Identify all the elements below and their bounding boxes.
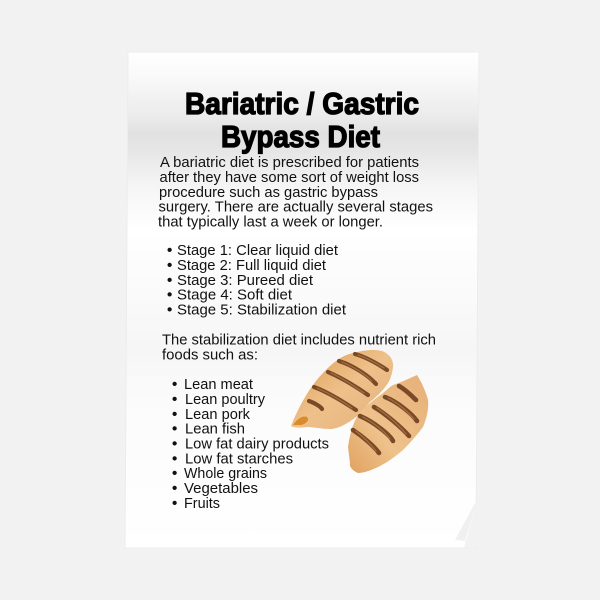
list: diet stages: • bbox=[167, 242, 172, 259]
list: nutrient rich foods: • bbox=[172, 406, 177, 423]
list: diet stages: • bbox=[167, 272, 172, 289]
stabilization paragraph bbox=[162, 332, 436, 364]
page curl bbox=[455, 498, 478, 548]
list: nutrient rich foods: • bbox=[172, 465, 177, 482]
title bbox=[185, 86, 419, 154]
list: diet stages: Stage 3: Pureed diet bbox=[177, 273, 313, 289]
list: diet stages bbox=[167, 242, 346, 318]
list: nutrient rich foods: • bbox=[172, 420, 177, 438]
intro paragraph: that typically last a week or longer. bbox=[158, 214, 383, 230]
list: nutrient rich foods: • bbox=[172, 495, 177, 512]
list: diet stages: • bbox=[167, 257, 172, 274]
title: Bariatric / Gastric bbox=[185, 86, 419, 121]
list: nutrient rich foods: • bbox=[172, 436, 177, 452]
list: diet stages: Stage 2: Full liquid diet bbox=[177, 258, 326, 274]
icon: grilled chicken breasts bbox=[291, 350, 428, 473]
list: nutrient rich foods: • bbox=[172, 391, 177, 408]
intro paragraph: surgery. There are actually several stages bbox=[158, 200, 433, 216]
title: Bypass Diet bbox=[221, 119, 380, 154]
list: nutrient rich foods: Vegetables bbox=[184, 481, 258, 497]
list: nutrient rich foods: Fruits bbox=[184, 496, 220, 512]
list: diet stages: Stage 4: Soft diet bbox=[177, 288, 292, 304]
poster sheet bbox=[125, 52, 479, 548]
intro paragraph: after they have some sort of weight loss bbox=[160, 170, 419, 186]
stabilization paragraph: The stabilization diet includes nutrient rich bbox=[162, 332, 436, 348]
intro paragraph bbox=[158, 155, 433, 230]
list: diet stages: Stage 1: Clear liquid diet bbox=[177, 243, 338, 259]
left chicken breast bbox=[291, 350, 393, 429]
list: nutrient rich foods bbox=[172, 376, 329, 512]
list: nutrient rich foods: • bbox=[172, 480, 177, 497]
list: diet stages: Stage 5: Stabilization diet bbox=[177, 302, 346, 318]
list: nutrient rich foods: Lean fish bbox=[185, 422, 245, 438]
intro paragraph: procedure such as gastric bypass bbox=[159, 185, 378, 201]
list: nutrient rich foods: Low fat starches bbox=[185, 452, 293, 468]
list: nutrient rich foods: • bbox=[172, 450, 177, 468]
list: nutrient rich foods: • bbox=[172, 376, 177, 393]
list: diet stages: • bbox=[167, 286, 172, 304]
right chicken breast bbox=[348, 375, 428, 473]
list: nutrient rich foods: Low fat dairy products bbox=[185, 436, 329, 452]
list: nutrient rich foods: Lean pork bbox=[185, 407, 251, 423]
list: nutrient rich foods: Whole grains bbox=[184, 466, 267, 482]
intro paragraph: A bariatric diet is prescribed for patients bbox=[160, 155, 419, 171]
list: nutrient rich foods: Lean meat bbox=[184, 377, 253, 393]
list: diet stages: • bbox=[167, 302, 172, 318]
stabilization paragraph: foods such as: bbox=[162, 348, 258, 364]
list: nutrient rich foods: Lean poultry bbox=[185, 392, 266, 408]
